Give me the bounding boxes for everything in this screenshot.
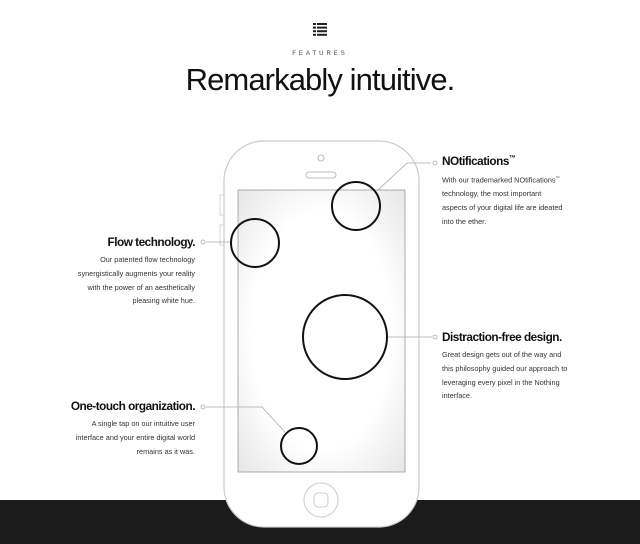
- feature: one-touch organization: A single tap on our intuitive user: [92, 419, 195, 428]
- feature: flow technology: Flow technology.: [108, 235, 195, 249]
- title: Remarkably intuitive.: [186, 62, 454, 97]
- feature: notifications: NOtifications™: [442, 154, 515, 168]
- eyebrow: features: FEATURES: [292, 51, 348, 57]
- feature: one-touch organization: remains as it was.: [137, 447, 195, 456]
- icon: list menu: [313, 23, 327, 36]
- feature: notifications: aspects of your digital life are ideated: [442, 203, 562, 212]
- feature: notifications: [442, 154, 562, 226]
- feature: one-touch organization: interface and your entire digital world: [76, 433, 195, 442]
- feature: distraction-free design: interface.: [442, 391, 472, 400]
- feature: flow technology: pleasing white hue.: [133, 296, 195, 305]
- feature: notifications: into the ether.: [442, 217, 486, 226]
- feature: flow technology: Our patented flow technology: [100, 255, 195, 264]
- feature: distraction-free design: this philosophy guided our approach to: [442, 364, 567, 373]
- leader lines: [201, 161, 437, 432]
- feature: flow technology: synergistically augments your reality: [78, 269, 195, 278]
- feature: distraction-free design: Distraction-free design.: [442, 330, 562, 344]
- highlight circles: [231, 182, 387, 464]
- feature: notifications: With our trademarked NOtifications™: [442, 175, 560, 184]
- feature: notifications: technology, the most important: [442, 189, 541, 198]
- feature: distraction-free design: Great design gets out of the way and: [442, 350, 561, 359]
- footer band: [0, 500, 640, 544]
- feature: distraction-free design: [442, 330, 567, 400]
- feature: flow technology: with the power of an aesthetically: [88, 283, 195, 292]
- feature: flow technology: [78, 235, 195, 305]
- feature: one-touch organization: [71, 399, 195, 456]
- feature: one-touch organization: One-touch organization.: [71, 399, 195, 413]
- feature: distraction-free design: leveraging every pixel in the Nothing: [442, 378, 560, 387]
